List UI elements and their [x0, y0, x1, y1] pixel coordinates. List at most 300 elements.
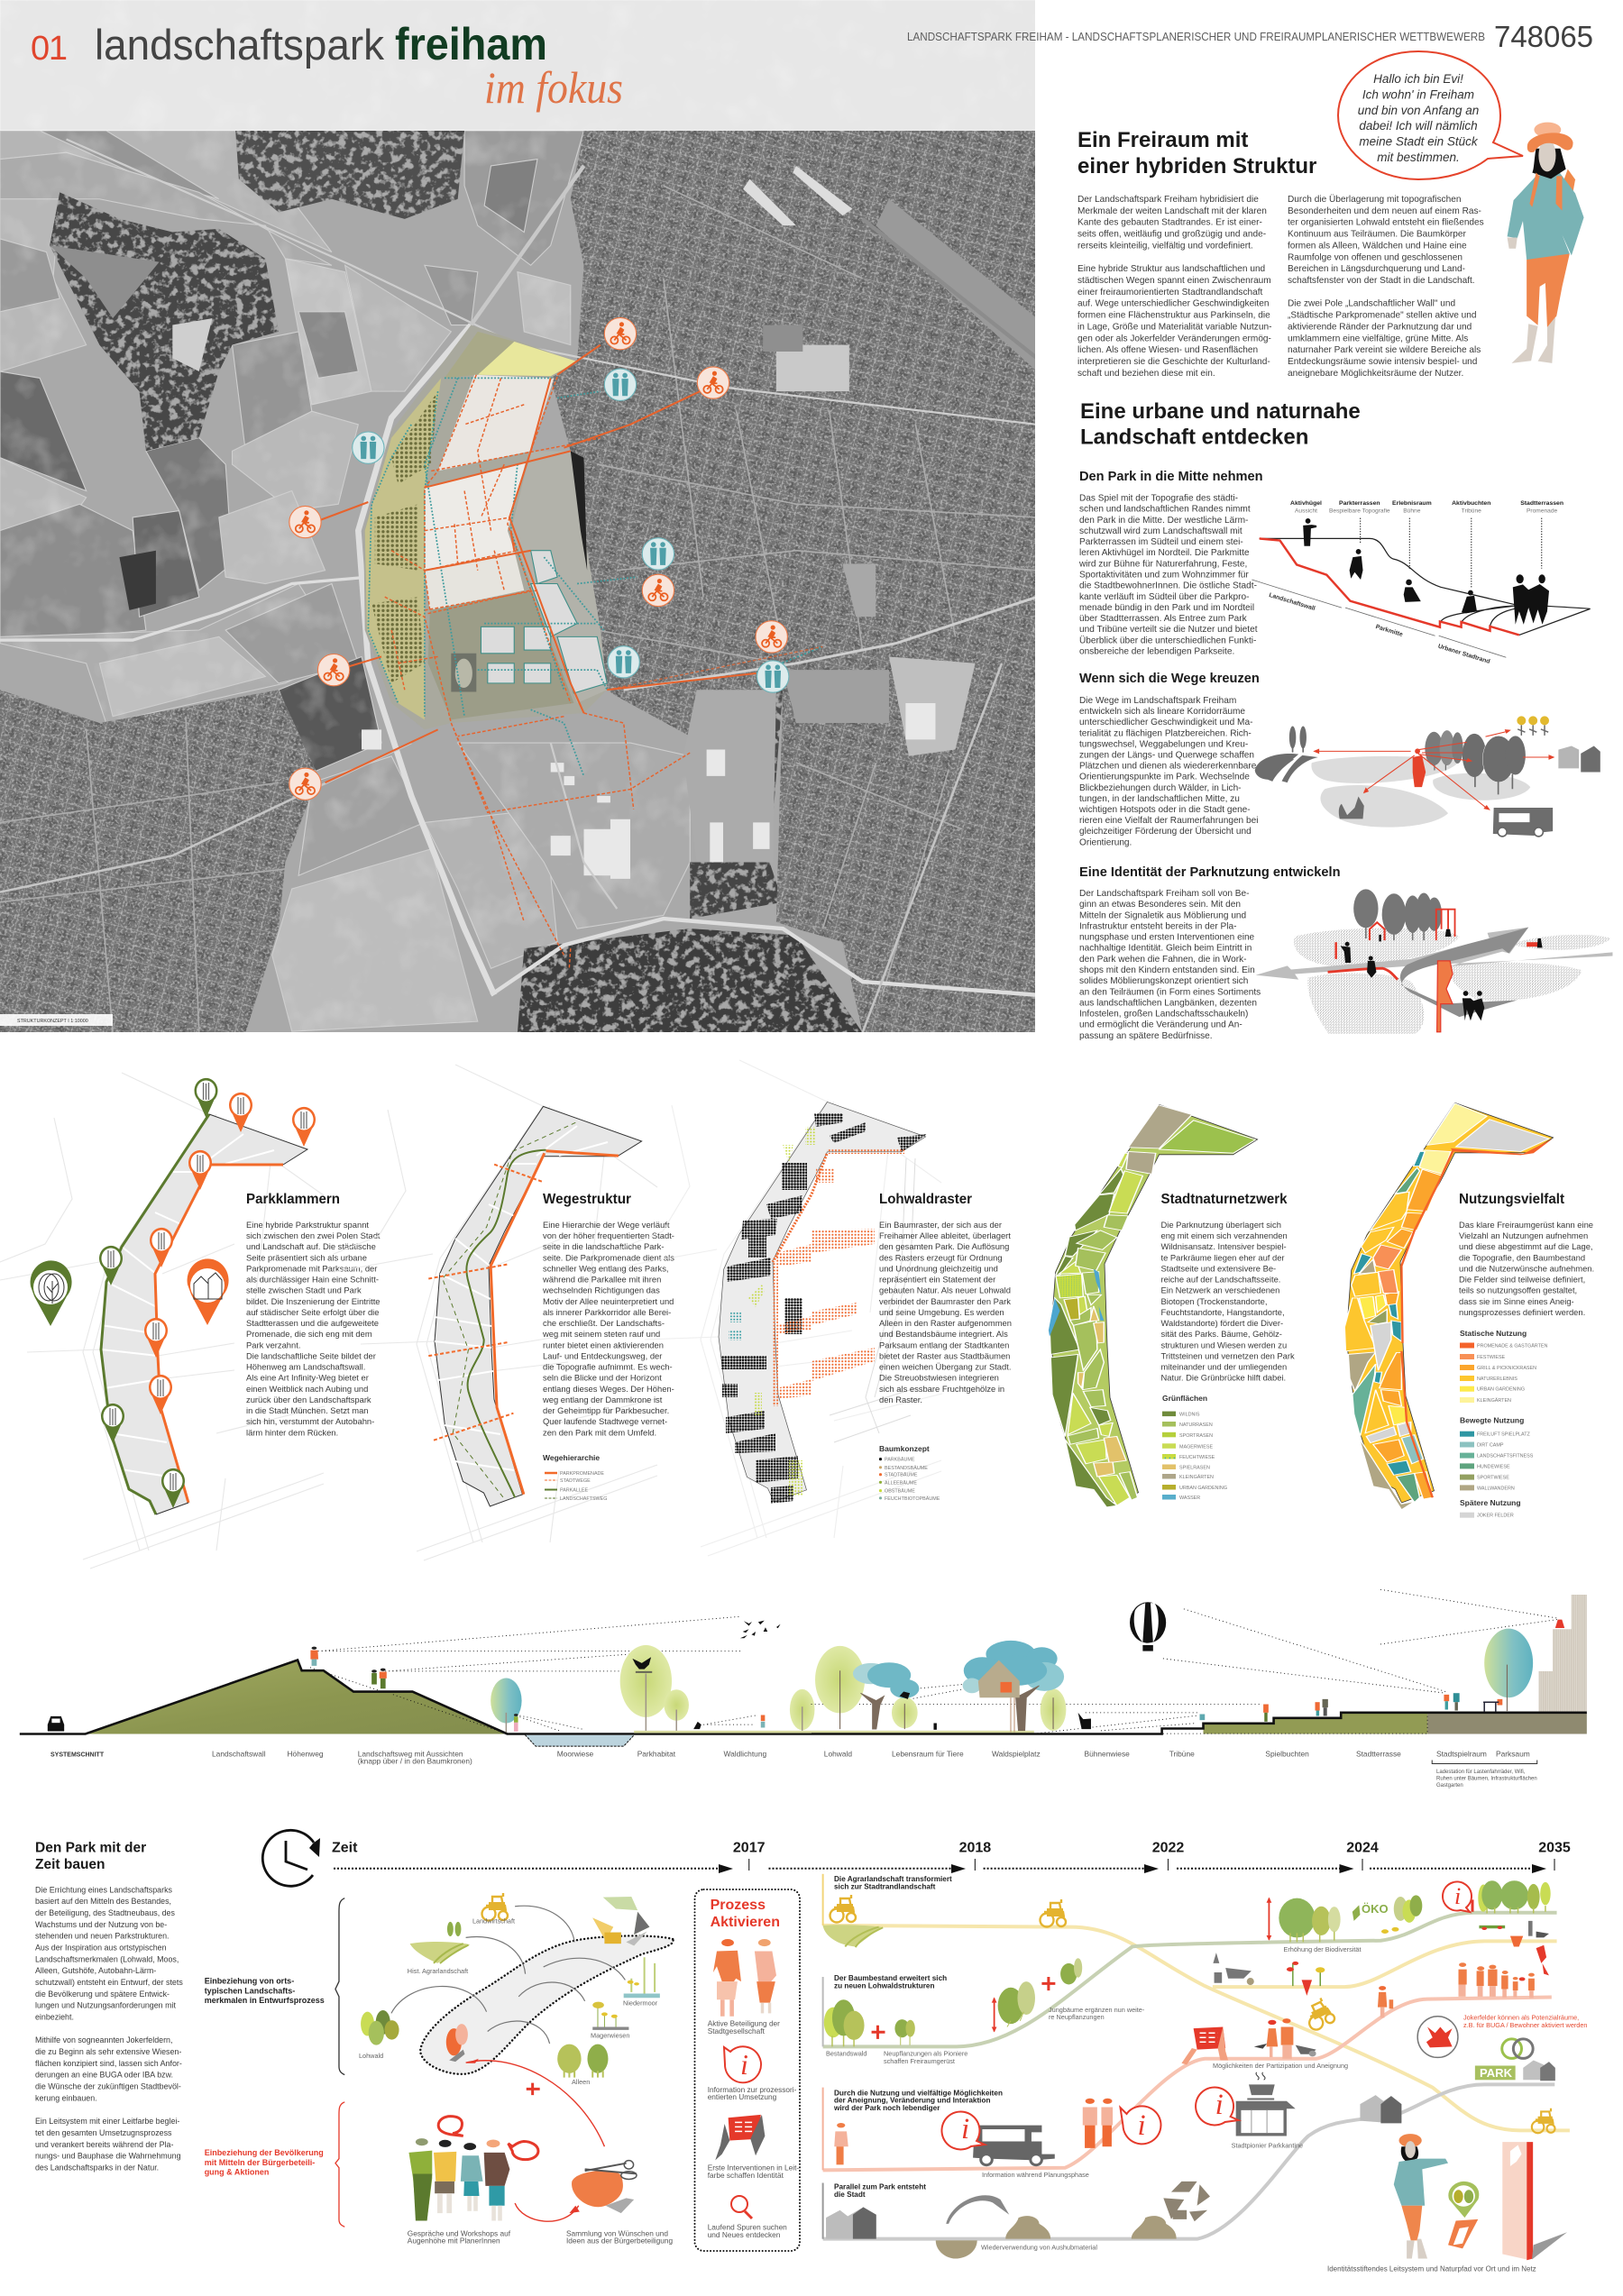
small captions: Jungbäume ergänzen nun weite-: [1049, 2006, 1145, 2014]
paragraph: der Beteiligung, des Stadtneubaus, des: [35, 1908, 175, 1917]
section labels: Höhenweg: [287, 1749, 324, 1758]
paragraph: runter bietet einen aktivierenden: [543, 1340, 664, 1349]
paragraph: Parkterrassen im Südteil und einem stei-: [1079, 537, 1243, 547]
labels: involvement levels: merkmalen in Entwurfsprozess: [205, 1996, 325, 2005]
paragraph: strukturen und Wiesen werden zu: [1161, 1340, 1287, 1349]
paragraph: seite. Die Parkpromenade dient als: [543, 1252, 674, 1262]
legend: Wegehierarchie: PARKPROMENADE: [560, 1471, 604, 1477]
legend: Grünflächen: FEUCHTWIESE: [1179, 1455, 1215, 1460]
paragraph: als innerer Parkkorridor alle Berei-: [543, 1307, 671, 1317]
paragraph: die Topografie aufnimmt. Es wech-: [543, 1362, 673, 1372]
text column 2: formen als Alleen, Wäldchen und Haine eine: [1288, 241, 1467, 251]
section labels: Moorwiese: [557, 1749, 594, 1758]
paragraph: schen und landschaftlichen Randes nimmt: [1079, 505, 1251, 515]
paragraph: miteinander und der umliegenden: [1161, 1362, 1287, 1372]
paragraph: Biotopen (Trockenstandorte,: [1161, 1296, 1267, 1306]
section labels: Ladestation für Lastenfahrräder, Wifi,: [1436, 1770, 1526, 1775]
diagram: park cross-section: Bühne: [1403, 508, 1421, 514]
legend: Grünflächen: MAGERWIESE: [1179, 1444, 1213, 1450]
section labels: Stadtterrasse: [1356, 1749, 1401, 1758]
icon: two citizens: [713, 1939, 776, 2017]
chart: parallel development timelines: [823, 1874, 1587, 2273]
paragraph: Seite präsentiert sich als urbane: [246, 1252, 367, 1262]
legend: Nutzung: WALLWANDERN: [1477, 1486, 1515, 1491]
paragraph: Höhenweg am Landschaftswall.: [246, 1362, 365, 1372]
paragraph: Orientierungspunkte im Park. Wechselnde: [1079, 773, 1250, 782]
labels: involvement levels: mit Mitteln der Bürgerbeteili-: [205, 2158, 315, 2167]
paragraph: Die Streuobstwiesen integrieren: [879, 1373, 999, 1383]
paragraph: basiert auf den Mitteln des Bestandes,: [35, 1897, 171, 1906]
paragraph: reiche auf der Landschaftsseite.: [1161, 1275, 1280, 1285]
paragraph: terialität zu flächigen Platzbereichen. Rich-: [1079, 728, 1252, 738]
paragraph: und Bestandsbäume integriert. Als: [879, 1329, 1008, 1339]
legend: Grünflächen: [1162, 1394, 1227, 1501]
heading: Stadtnaturnetzwerk: [1161, 1192, 1288, 1207]
scale label: STRUKTURKONZEPT I 1:10000: [17, 1019, 88, 1024]
paragraph: kante verläuft im Südteil über die Parkpro-: [1079, 592, 1250, 602]
chart: parallel development timelines: i: [1454, 1883, 1461, 1909]
bold stage captions: zu neuen Lohwaldstrukturen: [834, 1981, 934, 1990]
speech bubble: Evi: dabei! Ich will nämlich: [1359, 119, 1478, 133]
concept diagram: local landscape features and citizen participation: Magerwiesen: [591, 2032, 629, 2040]
heading: Eine urbane Landschaft: Eine urbane und naturnahe: [1080, 399, 1361, 424]
labels: involvement levels: gung & Aktionen: [205, 2168, 269, 2177]
box: Prozess Aktivieren: Prozess: [711, 1898, 766, 1913]
concept diagram: local landscape features and citizen participation: Niedermoor: [623, 1999, 658, 2007]
concept diagram: local landscape features and citizen participation: Augenhöhe mit PlanerInnen: [408, 2237, 500, 2246]
concept diagram: local landscape features and citizen participation: Gespräche und Workshops auf: [408, 2228, 511, 2237]
box: Prozess Aktivieren: und Neues entdecken: [708, 2230, 781, 2239]
small captions: Bestandswald: [826, 2050, 867, 2057]
legend: Nutzung: DIRT CAMP: [1477, 1442, 1504, 1448]
chart: parallel development timelines: i: [1215, 2089, 1224, 2121]
paragraph: Infrastruktur entsteht bereits in der Pla-: [1079, 921, 1236, 931]
diagram: sight lines at crossing: [1255, 716, 1600, 837]
paragraph: einbezieht.: [35, 2013, 74, 2022]
paragraph: und die Nutzerwünsche aufnehmen.: [1459, 1263, 1594, 1273]
small captions: [826, 1945, 1587, 2273]
bold stage captions: die Stadt: [834, 2191, 866, 2199]
paragraph: Aus der Inspiration aus ortstypischen: [35, 1944, 167, 1953]
timeline axis: 2035: [1538, 1841, 1571, 1856]
paragraph: wird zur Bühne für Naturerfahrung, Feste,: [1078, 559, 1247, 569]
paragraph: von der höher frequentierten Stadt-: [543, 1230, 674, 1240]
section labels: Parkhabitat: [637, 1749, 676, 1758]
paragraph: Überblick über die unterschiedlichen Funkti-: [1079, 635, 1256, 645]
legend: Baumkonzept: ALLEEBÄUME: [885, 1479, 917, 1486]
timeline axis: Zeit: [332, 1841, 358, 1856]
paragraph: an den Teilräumen (in Form eines Sortiments: [1079, 987, 1261, 997]
paragraph: shops mit den Kindern entstanden sind. Ein: [1079, 965, 1255, 975]
paragraph: nungs- und Bauphase die Wahrnehmung: [35, 2152, 181, 2161]
speech bubble: Evi: mit bestimmen.: [1377, 151, 1460, 164]
paragraph: Natur. Die Grünbrücke hilft dabei.: [1161, 1373, 1286, 1383]
speech bubble: Evi: [1338, 51, 1523, 179]
section labels: (knapp über / in den Baumkronen): [358, 1757, 472, 1766]
paragraph: ginn an etwas Besonderes sein. Mit den: [1079, 900, 1241, 910]
diagram: park cross-section: Aussicht: [1295, 508, 1317, 514]
paragraph: Das klare Freiraumgerüst kann eine: [1459, 1220, 1593, 1230]
paragraph: aus landschaftlichen Langbänken, dezenten: [1079, 998, 1257, 1008]
small captions: Identitätsstiftendes Leitsystem und Naturpfad vor Ort und im Netz: [1327, 2264, 1536, 2273]
paragraph: bildet. Die Inszenierung der Eintritte: [246, 1296, 381, 1306]
paragraph: zungen der Längs- und Querwege schaffen: [1079, 750, 1254, 761]
paragraph: Eine Hierarchie der Wege verläuft: [543, 1220, 670, 1230]
heading: Parkklammern: [246, 1192, 340, 1207]
legend: Nutzung: Bewegte Nutzung: [1460, 1416, 1524, 1425]
box: Prozess Aktivieren: Information zur prozessori-: [708, 2085, 797, 2094]
paragraph: Vielzahl an Nutzungen aufnehmen: [1459, 1230, 1588, 1240]
text column 2: ter organisierten Lohwald entsteht ein fließendes: [1288, 218, 1484, 228]
labels: involvement levels: Einbeziehung von orts-: [205, 1976, 294, 1985]
icon: sign carried by figures: [715, 2115, 765, 2160]
paragraph: Motiv der Allee neuinterpretiert und: [543, 1296, 674, 1306]
diagram: park cross-section: Aktivbuchten: [1452, 500, 1490, 507]
diagram: park cross-section: Parkterrassen: [1339, 500, 1380, 507]
section labels: Bühnenwiese: [1084, 1749, 1130, 1758]
panel: system section: [20, 1589, 1587, 1788]
paragraph: die zu Beginn als sehr extensive Wiesen-: [35, 2047, 181, 2056]
text column 1: seits offen, weitläufig und großzügig und ande-: [1077, 230, 1266, 240]
header band: freiham: [395, 19, 547, 69]
box: Prozess Aktivieren: farbe schaffen Identität: [708, 2171, 784, 2180]
text column 2: umklammern eine vielfältige, grüne Mitte. Als: [1288, 334, 1468, 343]
panel: Den Park in die Mitte nehmen: [1078, 470, 1591, 665]
legend: Grünflächen: WASSER: [1179, 1496, 1200, 1501]
paragraph: sich hin, verstummt der Autobahn-: [246, 1416, 374, 1426]
paragraph: Alleen in den Raster aufgenommen: [879, 1318, 1012, 1328]
text column 2: Durch die Überlagerung mit topografischen: [1288, 194, 1461, 205]
paragraph: Die landschaftliche Seite bildet der: [246, 1350, 376, 1360]
paragraph: Alleen, Gutshöfe, Autobahn-Lärm-: [35, 1966, 156, 1975]
paragraph: dass sie im Sinne eines Aneig-: [1459, 1296, 1574, 1306]
bold stage captions: Durch die Nutzung und vielfältige Möglichkeiten: [834, 2090, 1003, 2097]
legend: Baumkonzept: OBSTBÄUME: [885, 1488, 915, 1495]
legend: Wegehierarchie: STADTWEGE: [560, 1478, 591, 1484]
legend: Grünflächen: NATURRASEN: [1179, 1422, 1213, 1428]
paragraph: stelle zwischen Stadt und Park: [246, 1285, 362, 1295]
box: Prozess Aktivieren: Stadtgesellschaft: [708, 2026, 766, 2035]
text column 2: Raumfolge von offenen und geschlossenen: [1288, 252, 1463, 262]
paragraph: einen Weitblick nach Aubing und: [246, 1384, 368, 1394]
small captions: Erhöhung der Biodiversität: [1284, 1945, 1362, 1953]
paragraph: passung an spätere Bedürfnisse.: [1079, 1031, 1213, 1041]
paragraph: Wildnisansatz. Intensiver bespiel-: [1161, 1241, 1287, 1251]
speech bubble: Evi: Ich wohn' in Freiham: [1362, 88, 1474, 101]
panel: aerial structure concept map: [0, 0, 1623, 1038]
legend: Nutzung: URBAN GARDENING: [1477, 1387, 1525, 1393]
timeline axis: 2022: [1152, 1841, 1184, 1856]
paragraph: die Topografie, den Baumbestand: [1459, 1252, 1585, 1262]
map: use variety: [1344, 1102, 1554, 1510]
paragraph: sich zwischen den zwei Polen Stadt: [246, 1230, 381, 1240]
paragraph: Eine hybride Parkstruktur spannt: [246, 1220, 369, 1230]
text column 2: Bereichen in Längsdurchquerung und Land-: [1288, 264, 1465, 274]
paragraph: seln die Blicke und der Horizont: [543, 1373, 662, 1383]
paragraph: als durchlässiger Hain eine Schnitt-: [246, 1275, 379, 1285]
text column 2: „Städtische Parkpromenade" stellen aktive und: [1288, 311, 1477, 321]
Öko label: ÖKO: [1362, 1902, 1389, 1916]
paragraph: onsbereiche der lebendigen Parkseite.: [1079, 646, 1234, 656]
text column 1: in Lage, Größe und Materialität variable Nutzun-: [1077, 322, 1271, 332]
paragraph: kerung einbauen.: [35, 2093, 97, 2102]
paragraph: Lauf- und Entdeckungsweg, der: [543, 1350, 662, 1360]
subheading: Eine Identität der Parknutzung entwickeln: [1079, 865, 1341, 880]
diagram: park cross-section: Tribüne: [1462, 508, 1481, 514]
text column 1: Merkmale der weiten Landschaft mit der klaren: [1077, 206, 1267, 216]
paragraph: zen den Park mit dem Umfeld.: [543, 1427, 656, 1437]
box: Prozess Aktivieren: Erste Interventionen in Leit-: [708, 2163, 799, 2173]
paragraph: solides Möblierungskonzept orientiert sich: [1079, 976, 1248, 986]
labels: involvement levels: typischen Landschafts-: [205, 1986, 295, 1995]
paragraph: tet den gesamten Umsetzugnsprozess: [35, 2128, 172, 2137]
timeline axis: [332, 1841, 1571, 1873]
icons: pedestrian route markers: [353, 369, 789, 692]
paragraph: Feuchtstandorte, Hangstandorte,: [1161, 1307, 1285, 1317]
paragraph: wichtigen Hotspots oder in die Stadt gene-: [1078, 805, 1251, 815]
legend: Grünflächen: KLEINGÄRTEN: [1179, 1474, 1214, 1480]
paragraph: Der Landschaftspark Freiham soll von Be-: [1079, 889, 1250, 899]
legend: Nutzung: GRILL & PICKNICKRASEN: [1477, 1366, 1536, 1371]
heading: Lohwaldraster: [879, 1192, 972, 1207]
concept diagram: local landscape features and citizen participation: Alleen: [572, 2078, 590, 2086]
paragraph: während die Parkallee mit ihren: [542, 1275, 661, 1285]
legend: Grünflächen: WILDNIS: [1179, 1413, 1200, 1418]
small captions: Stadtpionier Parkkantine: [1232, 2142, 1303, 2150]
paragraph: Ein Leitsystem mit einer Leitfarbe beglei-: [35, 2117, 179, 2126]
paragraph: nungsphase und ersten Interventionen eine: [1079, 933, 1255, 943]
diagram captions: Landwirtschaft: [472, 1917, 515, 1926]
heading: Nutzungsvielfalt: [1459, 1192, 1565, 1207]
small captions: Information während Planungsphase: [982, 2171, 1089, 2179]
icon: info bubble: i: [740, 2048, 748, 2081]
subheading: Wenn sich die Wege kreuzen: [1079, 672, 1260, 686]
heading: Wegestruktur: [543, 1192, 631, 1207]
legend: Baumkonzept: Baumkonzept: [879, 1444, 930, 1453]
section labels: Tribüne: [1169, 1749, 1195, 1758]
paragraph: Ein Netzwerk an verschiedenen: [1161, 1285, 1279, 1295]
text column 1: städtischen Wegen spannt einen Zwischenraum: [1077, 276, 1271, 286]
paragraph: Die Felder sind teilweise definiert,: [1459, 1275, 1585, 1285]
heading: Ein Freiraum: Ein Freiraum mit: [1077, 128, 1248, 152]
paragraph: Stadtseite und extensivere Be-: [1161, 1263, 1276, 1273]
text column 1: gen oder als Jokerfelder Veränderungen ermög-: [1077, 334, 1271, 343]
section labels: Landschaftswall: [212, 1749, 266, 1758]
paragraph: Freihamer Allee ableitet, überlagert: [879, 1230, 1011, 1240]
paragraph: sität des Parks. Bäume, Gehölz-: [1161, 1329, 1282, 1339]
concept diagram: local landscape features and citizen participation: Hist. Agrarlandschaft: [408, 1967, 468, 1975]
text column 2: aktivierende Ränder der Parknutzung dar und: [1288, 322, 1472, 332]
legend: Nutzung: Statische Nutzung: [1460, 1329, 1527, 1338]
header band: [0, 0, 1623, 1038]
paragraph: Landschaftsmerkmalen (Lohwald, Moos,: [35, 1954, 179, 1963]
small captions: Jokerfelder können als Potenzialräume,: [1463, 2014, 1579, 2021]
diagram: park cross-section: Promenade: [1527, 508, 1558, 514]
paragraph: Trittsteinen und vernetzen den Park: [1161, 1350, 1295, 1360]
box: Prozess Aktivieren: Laufend Spuren suchen: [708, 2223, 787, 2232]
legend: Wegehierarchie: PARKALLEE: [560, 1487, 588, 1493]
section labels: Parksaum: [1496, 1749, 1530, 1758]
paragraph: Die Parknutzung überlagert sich: [1161, 1220, 1281, 1230]
paragraph: seite in die landschaftliche Park-: [543, 1241, 664, 1251]
section labels: Lebensraum für Tiere: [892, 1749, 964, 1758]
paragraph: weg entlang der Dammkrone ist: [542, 1395, 663, 1404]
paragraph: leren Aktivhügel im Nordteil. Die Parkmitte: [1079, 548, 1250, 558]
concept diagram: local landscape features and citizen participation: [335, 1893, 674, 2246]
page number: 01: [31, 30, 68, 68]
text column 1: einer freiraumorientierten Stadtrandlandschaft: [1077, 288, 1263, 297]
info bubbles: i: [961, 2113, 969, 2145]
legend: Nutzung: KLEINGÄRTEN: [1477, 1397, 1511, 1404]
paragraph: und Tribüne verteilt sie die Nutzer und bietet: [1079, 625, 1258, 635]
box: Prozess Aktivieren: Aktive Beteiligung der: [708, 2019, 780, 2028]
paragraph: der Geheimtipp für Parkbesucher.: [543, 1405, 669, 1415]
figure: Evi: [1508, 123, 1584, 363]
paragraph: unterschiedlicher Geschwindigkeit und Ma-: [1079, 718, 1252, 727]
legend: Nutzung: HUNDEWIESE: [1477, 1464, 1510, 1469]
legend: Nutzung: LANDSCHAFTSFITNESS: [1477, 1454, 1534, 1459]
legend: Nutzung: NATURERLEBNIS: [1477, 1377, 1518, 1382]
paragraph: den gesamten Park. Die Auflösung: [879, 1241, 1009, 1251]
competition line and number: LANDSCHAFTSPARK FREIHAM - LANDSCHAFTSPLANERISCHER UND FREIRAUMPLANERISCHER WETTBWEWERB: [907, 31, 1485, 43]
concept diagram: local landscape features and citizen participation: Lohwald: [359, 2052, 383, 2060]
bold stage captions: [833, 1875, 1003, 2199]
timeline axis: 2018: [959, 1841, 991, 1856]
legend: Baumkonzept: PARKBÄUME: [885, 1457, 915, 1463]
icon: tree pin: [31, 1260, 72, 1326]
small captions: z.B. für BUGA / Bewohner aktiviert werden: [1463, 2021, 1587, 2029]
section labels: Lohwald: [824, 1749, 852, 1758]
PARK label: PARK: [1480, 2066, 1513, 2080]
legend: Wegehierarchie: LANDSCHAFTSWEG: [560, 1496, 607, 1502]
paragraph: die StadtbewohnerInnen. Die östliche Stadt-: [1079, 581, 1257, 591]
paragraph: und diese abgestimmt auf die Lage,: [1459, 1241, 1593, 1251]
paragraph: Stadtterassen und die aufgeweitete: [246, 1318, 379, 1328]
paragraph: eng mit einem sich verzahnenden: [1161, 1230, 1288, 1240]
paragraph: Ein Baumraster, der sich aus der: [879, 1220, 1002, 1230]
heading: Den Park mit der: [35, 1841, 146, 1856]
bold stage captions: wird der Park noch lebendiger: [833, 2104, 940, 2112]
paragraph: Orientierung.: [1079, 837, 1132, 847]
text column 2: Entdeckungsräume sowie intensiv bespiel- und: [1288, 357, 1477, 367]
paragraph: Infostelen, großen Landschaftsschaukeln): [1079, 1010, 1248, 1020]
heading: Zeit bauen: [35, 1857, 105, 1872]
paragraph: verbindet der Baumraster den Park: [879, 1296, 1011, 1306]
text column 2: schaftsfenster von der Stadt in die Landschaft.: [1288, 276, 1475, 286]
panel: Nutzungsvielfalt: [1344, 1102, 1594, 1519]
paragraph: Mitteln der Signaletik aus Möblierung und: [1079, 910, 1246, 920]
info bubbles: [941, 2111, 985, 2149]
title: landschaftspark: [95, 21, 384, 69]
section labels: Ruhen unter Bäumen, Infrastrukturflächen: [1436, 1776, 1537, 1781]
paragraph: Als eine Art Infinity-Weg bietet er: [246, 1373, 369, 1383]
paragraph: Wachstums und der Nutzung von be-: [35, 1920, 167, 1929]
legend: Nutzung: JOKER FELDER: [1477, 1514, 1514, 1519]
panel: Eine Identität der Parknutzung entwickeln: [1079, 865, 1612, 1041]
paragraph: repräsentiert ein Statement der: [879, 1275, 995, 1285]
heading: Eine urbane Landschaft: Landschaft entdecken: [1080, 425, 1308, 449]
legend: Grünflächen: SPIELRASEN: [1179, 1466, 1210, 1471]
legend: Nutzung: [1460, 1329, 1547, 1519]
concept diagram: local landscape features and citizen participation: Ideen aus der Bürgerbeteiligung: [566, 2237, 673, 2246]
paragraph: Park verzahnt.: [246, 1340, 300, 1349]
paragraph: Sportaktivitäten und zum Wohnzimmer für: [1079, 570, 1249, 580]
legend: Nutzung: Spätere Nutzung: [1460, 1498, 1521, 1507]
legend: Baumkonzept: BESTANDSBÄUME: [885, 1465, 928, 1471]
paragraph: menade bündig in den Park und im Nordteil: [1079, 603, 1254, 613]
panel: Wenn sich die Wege kreuzen: [1078, 672, 1600, 847]
map: green spaces: [1049, 1104, 1258, 1507]
paragraph: stehenden und neuen Parkstrukturen.: [35, 1932, 170, 1941]
paragraph: gebauten Natur. Als neuer Lohwald: [879, 1285, 1011, 1295]
text column 1: auf. Wege unterschiedlicher Geschwindigkeiten: [1077, 299, 1269, 309]
text column 1: rerseits kleinteilig, vielfältig und vordefiniert.: [1077, 241, 1253, 251]
icon: clock: [262, 1830, 320, 1886]
paragraph: des Landschaftsparks in der Natur.: [35, 2163, 159, 2172]
paragraph: weg mit seinem steten rauf und: [542, 1329, 660, 1339]
text column 1: Kante des gebauten Stadtrandes. Er ist einer-: [1077, 218, 1262, 228]
small captions: Wiederverwendung von Aushubmaterial: [981, 2244, 1097, 2252]
paragraph: den Park in die Mitte. Der westliche Lärm-: [1079, 516, 1248, 526]
labels: involvement levels: [205, 1976, 325, 2177]
section labels: Spielbuchten: [1265, 1749, 1309, 1758]
labels: involvement levels: Einbeziehung der Bevölkerung: [205, 2148, 324, 2157]
bold stage captions: Die Agrarlandschaft transformiert: [834, 1875, 952, 1883]
small captions: Neupflanzungen als Pioniere: [884, 2050, 967, 2057]
paragraph: schutzwall) entsteht ein Entwurf, der stets: [35, 1978, 183, 1987]
paragraph: nachhaltige Identität. Gleich beim Eintritt in: [1079, 944, 1252, 954]
paragraph: Quer laufende Stadtwege vernet-: [543, 1416, 667, 1426]
timeline axis: 2017: [733, 1841, 766, 1856]
speech bubble: Evi: meine Stadt ein Stück: [1359, 135, 1479, 148]
paragraph: tungen, in der landschaftlichen Mitte, zu: [1079, 794, 1240, 804]
chart: parallel development timelines: i: [1138, 2109, 1146, 2142]
legend: Grünflächen: URBAN GARDENING: [1179, 1486, 1227, 1491]
paragraph: zurück über den Landschaftspark: [246, 1395, 371, 1404]
paragraph: schutzwall wird zum Landschaftswall mit: [1079, 526, 1242, 536]
paragraph: Mithilfe von sogneannten Jokerfeldern,: [35, 2035, 172, 2044]
paragraph: te Parkräume liegen eher auf der: [1161, 1252, 1285, 1262]
paragraph: gleichzeitiger Förderung der Übersicht und: [1079, 826, 1252, 837]
paragraph: auf städischer Seite erfolgt über die: [246, 1307, 379, 1317]
diagram: park cross-section: Urbaner Stadtrand: [1437, 644, 1490, 665]
paragraph: über Stadtterrassen. Als Entree zum Park: [1079, 614, 1248, 624]
paragraph: Blickbeziehungen durch Wälder, in Lich-: [1079, 783, 1242, 793]
bold stage captions: Parallel zum Park entsteht: [834, 2183, 926, 2191]
box: Prozess Aktivieren: [694, 1889, 800, 2251]
paragraph: che erschließt. Der Landschafts-: [543, 1318, 665, 1328]
speech bubble: Evi: und bin von Anfang an: [1358, 104, 1479, 117]
paragraph: des Rasters erzeugt für Ordnung: [879, 1252, 1003, 1262]
diagram: park cross-section: Parkmitte: [1375, 624, 1404, 638]
paragraph: die Wünsche der zukünftigen Stadtbevöl-: [35, 2082, 181, 2091]
small captions: schaffen Freiraumgerüst: [884, 2057, 955, 2065]
section labels: Stadtspielraum: [1436, 1749, 1487, 1758]
legend: Nutzung: FREILUFT SPIELPLATZ: [1477, 1432, 1531, 1438]
bold stage captions: Der Baumbestand erweitert sich: [834, 1974, 947, 1982]
paragraph: teils so nutzungsoffen gestaltet,: [1459, 1285, 1577, 1295]
text column 1: interpretieren sie die Geschichte der Kulturland-: [1077, 357, 1270, 367]
concept diagram: local landscape features and citizen participation: Sammlung von Wünschen und: [566, 2228, 668, 2237]
paragraph: und Unordnung gleichzeitig und: [879, 1263, 998, 1273]
paragraph: Parkpromenade mit Parksaum, der: [246, 1263, 377, 1273]
diagram: park cross-section: Erlebnisraum: [1392, 500, 1432, 507]
legend: Nutzung: FESTWIESE: [1477, 1355, 1506, 1360]
paragraph: und ermöglicht die Veränderung und An-: [1079, 1020, 1242, 1030]
paragraph: wechselnden Richtigungen das: [542, 1285, 660, 1295]
map: path hierarchy: [334, 1065, 658, 1560]
subtitle: im fokus: [484, 62, 623, 113]
